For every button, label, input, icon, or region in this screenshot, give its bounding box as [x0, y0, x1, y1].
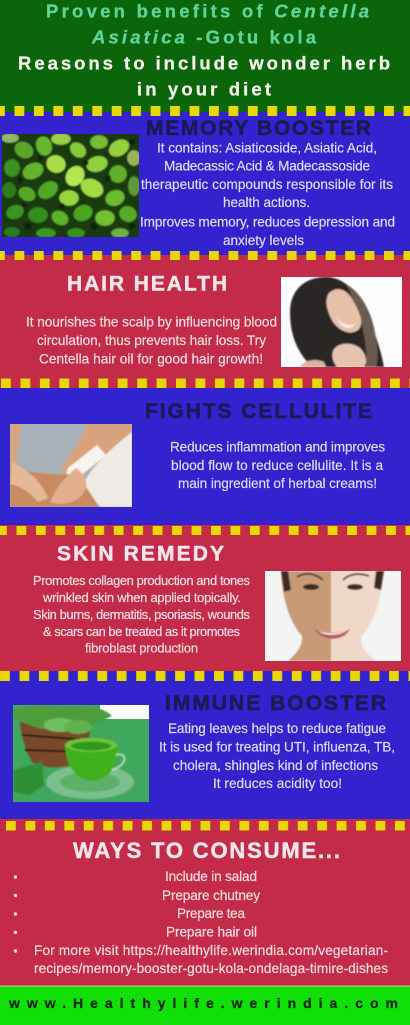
- text: memory booster description: Improves memory, reduces depression and: [140, 215, 395, 230]
- text: memory booster description: health actions.: [223, 195, 310, 210]
- heading: hair health: HAIR HEALTH: [67, 273, 227, 296]
- text: hair health description: It nourishes the scalp by influencing blood: [26, 315, 277, 330]
- heading: memory booster: MEMORY BOOSTER: [146, 117, 371, 140]
- title: proven benefits: Proven benefits of Centella: [46, 0, 369, 22]
- text: skin remedy description: wrinkled skin when applied topically.: [42, 590, 241, 605]
- title: proven benefits: Asiatica -Gotu kola: [91, 26, 317, 48]
- text: memory booster description: Madecassic Acid & Madecassoside: [164, 159, 370, 174]
- text: cellulite description: blood flow to reduce cellulite. It is a: [171, 458, 383, 473]
- text: hair health description: [26, 315, 277, 367]
- title: proven benefits: [46, 0, 369, 48]
- text: skin remedy description: & scars can be treated as it promotes: [43, 624, 240, 639]
- text: cellulite description: Reduces inflammation and improves: [170, 440, 385, 455]
- heading: fights cellulite: FIGHTS CELLULITE: [145, 400, 372, 423]
- subtitle: reasons to include: [18, 52, 390, 100]
- text: immune booster description: It reduces acidity too!: [213, 776, 342, 791]
- text: memory booster description: [140, 141, 395, 248]
- text: memory booster description: It contains: Asiaticoside, Asiatic Acid,: [157, 141, 377, 156]
- panel: skin remedy: [0, 525, 410, 671]
- panel: title banner: [0, 0, 410, 112]
- text: cellulite description: [170, 440, 385, 491]
- heading: skin remedy: SKIN REMEDY: [57, 543, 224, 566]
- text: skin remedy description: Promotes collagen production and tones: [33, 573, 250, 588]
- panel: memory booster: [2, 120, 394, 248]
- panel: hair health: [0, 255, 410, 388]
- list: ways to consume: Prepare tea: [177, 906, 245, 921]
- text: immune booster description: [159, 721, 395, 791]
- image: hands on thigh: [10, 424, 132, 507]
- text: skin remedy description: Skin burns, dermatitis, psoriasis, wounds: [33, 607, 250, 622]
- image: gotu kola leaves: [1, 133, 141, 238]
- text: memory booster description: therapeutic compounds responsible for its: [141, 177, 393, 192]
- footer: website address: www.Healthylife.werindia.com: [8, 995, 398, 1011]
- subtitle: reasons to include: in your diet: [137, 78, 271, 100]
- text: hair health description: circulation, thus prevents hair loss. Try: [37, 333, 266, 348]
- image: woman with healthy hair: [281, 277, 402, 367]
- list: ways to consume: recipes/memory-booster-gotu-kola-ondelaga-timire-dishes: [34, 961, 388, 976]
- panel: fights cellulite: [10, 403, 372, 507]
- text: memory booster description: anxiety levels: [223, 233, 304, 248]
- footer: website address: [0, 986, 410, 1025]
- text: cellulite description: main ingredient of herbal creams!: [178, 476, 377, 491]
- image: half-toned face: [265, 571, 401, 661]
- text: immune booster description: cholera, shingles kind of infections: [173, 758, 378, 773]
- image: green tea and leaves: [13, 705, 149, 802]
- panel: ways to consume: [0, 819, 410, 986]
- panel: immune booster: [13, 695, 386, 802]
- list: ways to consume: Prepare chutney: [162, 888, 260, 903]
- text: hair health description: Centella hair oil for good hair growth!: [39, 352, 263, 367]
- text: skin remedy description: fibroblast production: [85, 641, 198, 656]
- list: ways to consume: [14, 869, 388, 976]
- subtitle: reasons to include: Reasons to include wonder herb: [18, 52, 390, 74]
- list: ways to consume: For more visit https://healthylife.werindia.com/vegetarian-: [34, 943, 388, 958]
- list: ways to consume: Include in salad: [165, 869, 257, 884]
- heading: immune booster: IMMUNE BOOSTER: [165, 692, 386, 715]
- list: ways to consume: Prepare hair oil: [166, 925, 257, 940]
- divider row: yellow dashes: [0, 106, 410, 830]
- heading: ways to consume: WAYS TO CONSUME...: [73, 838, 340, 863]
- text: immune booster description: It is used for treating UTI, influenza, TB,: [159, 740, 395, 755]
- text: skin remedy description: [33, 573, 250, 656]
- text: immune booster description: Eating leaves helps to reduce fatigue: [168, 721, 386, 736]
